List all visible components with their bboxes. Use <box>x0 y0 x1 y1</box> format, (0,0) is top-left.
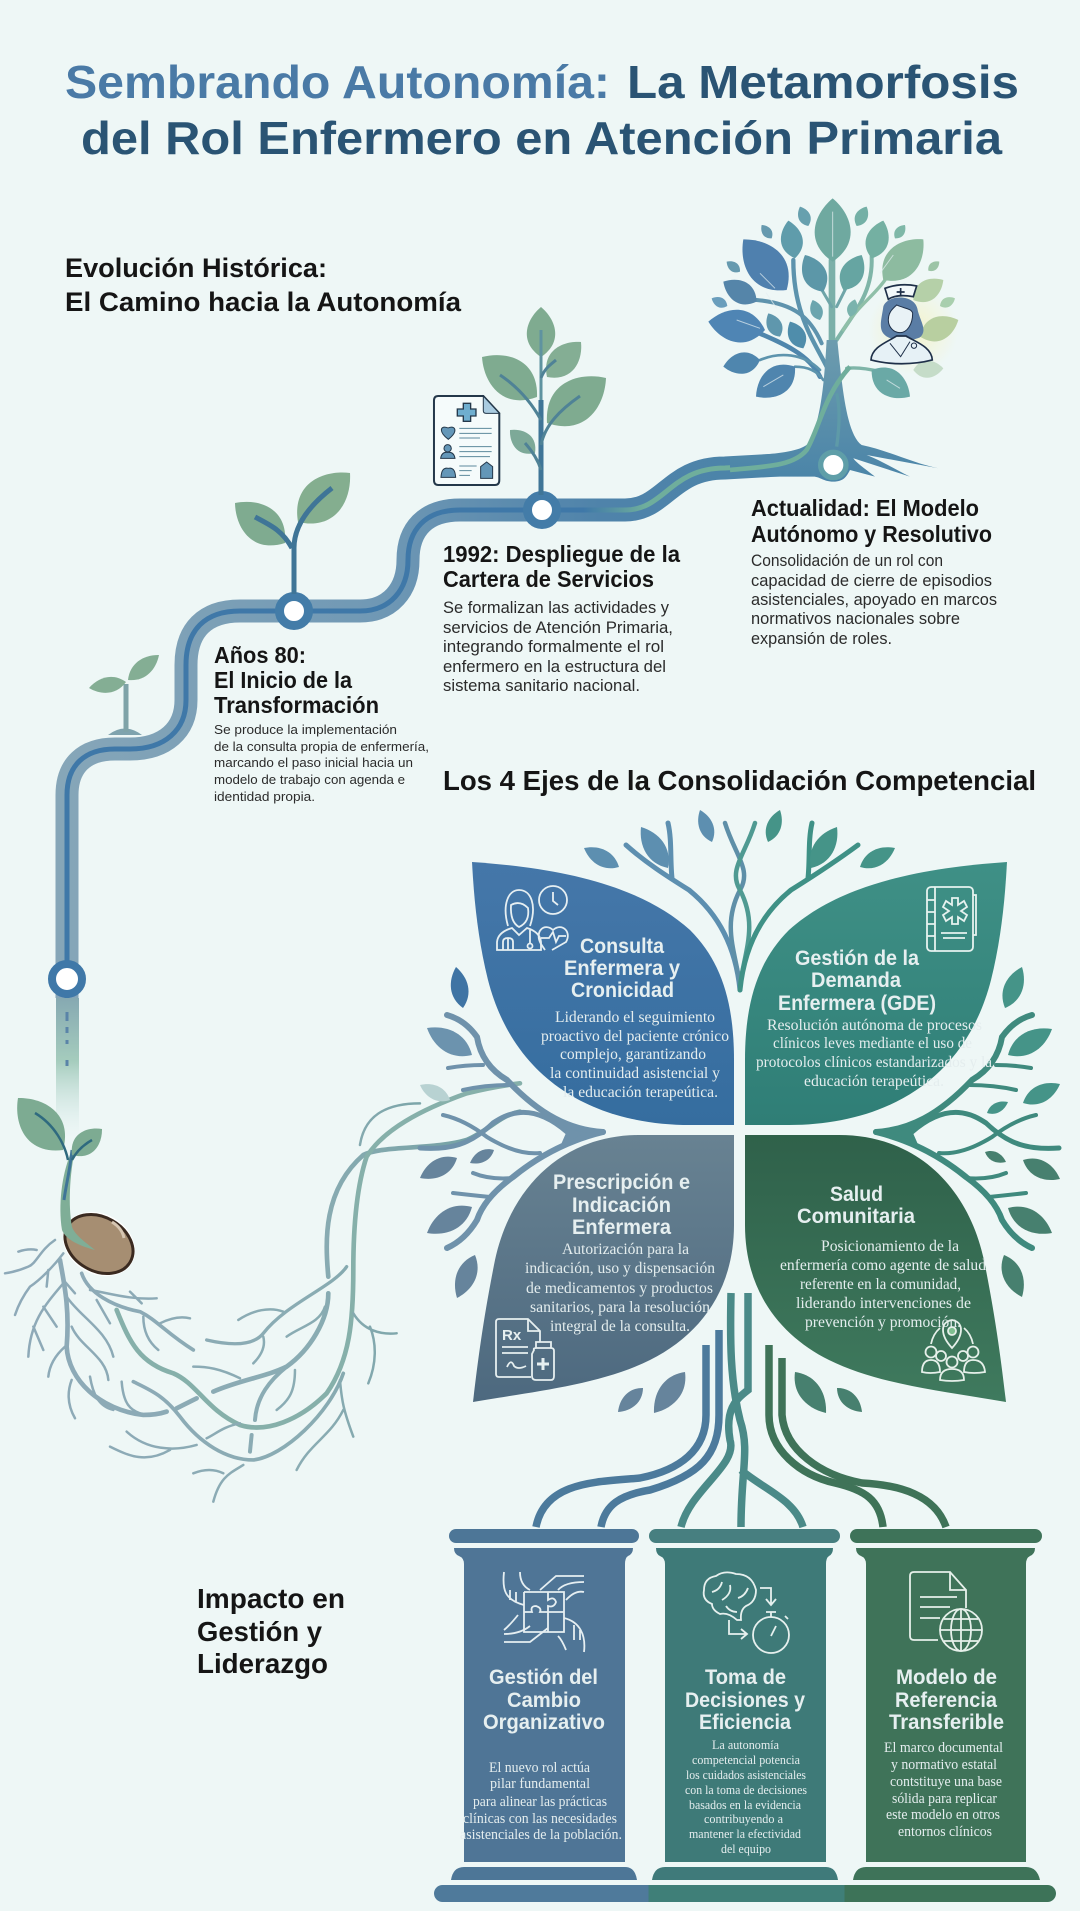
title: Organizativo <box>483 1711 605 1734</box>
text block: mantener la efectividad <box>689 1826 801 1841</box>
title: Cambio <box>507 1689 581 1712</box>
panel: pilar gestión del cambio <box>449 1529 639 1880</box>
text block: protocolos clínicos estandarizados y la <box>756 1054 992 1071</box>
tree branches and leaves <box>420 823 1059 1248</box>
text block: Liderando el seguimiento <box>555 1009 715 1026</box>
icon: seed with sprout <box>3 1085 147 1289</box>
text block: proactivo del paciente crónico <box>541 1028 729 1045</box>
title: Sembrando Autonomía: <box>65 56 610 108</box>
icon: prescription and bottle <box>496 1319 554 1380</box>
icon: final tree with nurse <box>706 198 963 482</box>
title: Prescripción e <box>553 1171 690 1194</box>
branches: left side <box>420 1015 603 1248</box>
milestone: 1992: 1992: Despliegue de la <box>443 541 680 567</box>
title: Eficiencia <box>699 1711 791 1734</box>
panel: salud comunitaria <box>745 1135 1006 1402</box>
icon: hands and puzzle <box>503 1572 584 1652</box>
text block: La autonomía <box>712 1737 779 1752</box>
milestone: años 80: modelo de trabajo con agenda e <box>214 772 405 787</box>
title: Referencia <box>895 1689 997 1712</box>
leaves around quadrants <box>416 808 1064 1419</box>
text block: para alinear las prácticas <box>473 1794 607 1810</box>
milestone: actualidad: Autónomo y Resolutivo <box>751 521 992 547</box>
title: del Rol Enfermero en Atención Primaria <box>81 112 1002 164</box>
node 3 <box>528 496 556 524</box>
title: Decisiones y <box>685 1689 805 1712</box>
text block: Autorización para la <box>562 1241 689 1258</box>
milestone: años 80: Se produce la implementación <box>214 722 397 737</box>
milestone: años 80: El Inicio de la <box>214 667 352 693</box>
milestone: 1992: enfermero en la estructura del <box>443 658 666 676</box>
title <box>797 1183 915 1228</box>
text block: este modelo en otros <box>886 1807 1000 1823</box>
title: Cronicidad <box>571 979 674 1002</box>
heading: impacto: Liderazgo <box>197 1648 328 1679</box>
text block: sanitarios, para la resolución <box>530 1299 710 1316</box>
heading: evolución histórica: Evolución Histórica: <box>65 253 327 283</box>
title <box>889 1666 1004 1734</box>
text block: Posicionamiento de la <box>821 1238 959 1255</box>
title <box>685 1666 805 1734</box>
icon: notebook <box>927 887 976 951</box>
milestone: actualidad: Actualidad: El Modelo <box>751 495 979 521</box>
milestone: años 80: Años 80: <box>214 642 306 668</box>
panel: consulta enfermera <box>472 862 734 1125</box>
text block <box>756 1017 992 1090</box>
node 1 <box>52 964 82 994</box>
milestone: años 80: identidad propia. <box>214 789 315 804</box>
panel: gestión de la demanda <box>745 862 1007 1125</box>
milestone: actualidad: expansión de roles. <box>751 630 892 648</box>
title: La Metamorfosis <box>627 56 1019 108</box>
icon: community <box>922 1320 985 1381</box>
icon: medical document <box>434 396 499 485</box>
milestone: actualidad <box>751 495 997 648</box>
branches: right side <box>876 1015 1059 1248</box>
milestone: años 80: Transformación <box>214 692 379 718</box>
title: Gestión de la <box>795 947 919 970</box>
icon: plant at node 2 <box>224 458 364 594</box>
text block <box>884 1740 1003 1840</box>
title <box>553 1171 690 1239</box>
text block: competencial potencia <box>692 1752 800 1767</box>
heading: 4 ejes: Los 4 Ejes de la Consolidación Competencial <box>443 765 1036 796</box>
panel: pilar toma de decisiones <box>649 1529 840 1880</box>
branches: upper canopy <box>626 823 858 990</box>
title: Enfermera y <box>564 957 680 980</box>
icon: prescription and bottle: Rx <box>502 1327 522 1344</box>
milestone: actualidad: capacidad de cierre de episodios <box>751 572 992 590</box>
milestone: actualidad: Consolidación de un rol con <box>751 552 943 570</box>
heading: impacto <box>197 1583 345 1679</box>
text block: asistenciales de la población. <box>460 1827 622 1843</box>
text block: la continuidad asistencial y <box>550 1065 720 1082</box>
icon: small seedling <box>88 649 164 735</box>
title <box>483 1666 605 1734</box>
icon: nurse, clock and heart <box>497 886 568 950</box>
title: Salud <box>830 1183 883 1206</box>
panel: pilar modelo de referencia <box>850 1529 1042 1880</box>
title <box>65 56 1019 164</box>
heading: impacto: Gestión y <box>197 1616 322 1647</box>
milestone: años 80 <box>214 642 429 804</box>
text block: integral de la consulta. <box>550 1318 690 1335</box>
milestone: 1992: Se formalizan las actividades y <box>443 599 670 617</box>
node 2 <box>280 596 308 626</box>
text block: la educación terapeútica. <box>563 1084 718 1101</box>
pillars plinth <box>434 1885 1056 1902</box>
text block <box>460 1760 622 1843</box>
icon: plant at node 3 <box>471 307 619 495</box>
milestone: actualidad: asistenciales, apoyado en marcos <box>751 591 997 609</box>
roots into pillars <box>536 1293 946 1527</box>
icon: nurse <box>871 285 932 364</box>
title: Comunitaria <box>797 1205 915 1228</box>
text block: entornos clínicos <box>898 1824 992 1840</box>
milestone: 1992: servicios de Atención Primaria, <box>443 619 673 637</box>
title: Gestión del <box>489 1666 598 1689</box>
text block: contribuyendo a <box>704 1811 783 1826</box>
heading: impacto: Impacto en <box>197 1583 345 1614</box>
text block: clínicas con las necesidades <box>463 1811 617 1827</box>
icon: brain and stopwatch <box>704 1572 789 1653</box>
text block: indicación, uso y dispensación <box>525 1260 715 1277</box>
text block: El marco documental <box>884 1740 1003 1756</box>
title <box>778 947 936 1015</box>
panel: prescripción <box>473 1135 734 1402</box>
text block: los cuidados asistenciales <box>686 1767 806 1782</box>
text block <box>525 1241 715 1335</box>
text block: contstituye una base <box>890 1774 1002 1790</box>
milestone: 1992 <box>443 541 680 695</box>
text block: educación terapeútica. <box>804 1073 944 1090</box>
title: Indicación <box>572 1194 671 1217</box>
text block: de medicamentos y productos <box>526 1280 713 1297</box>
milestone: años 80: de la consulta propia de enfermería, <box>214 739 429 754</box>
text block: enfermería como agente de salud <box>780 1257 986 1274</box>
heading: evolución histórica: El Camino hacia la Autonomía <box>65 287 462 317</box>
text block: liderando intervenciones de <box>796 1295 971 1312</box>
text block: sólida para replicar <box>892 1791 997 1807</box>
timeline path <box>56 462 833 1138</box>
text block: con la toma de decisiones <box>685 1782 807 1797</box>
text block: del equipo <box>721 1841 771 1856</box>
text block: Resolución autónoma de procesos <box>767 1017 982 1034</box>
text block: clínicos leves mediante el uso de <box>773 1035 972 1052</box>
milestone: 1992: sistema sanitario nacional. <box>443 677 640 695</box>
text block: El nuevo rol actúa <box>489 1760 590 1776</box>
milestone: 1992: Cartera de Servicios <box>443 566 654 592</box>
icon: document and globe <box>910 1572 982 1651</box>
title: Toma de <box>705 1666 786 1689</box>
text block: y normativo estatal <box>891 1757 997 1773</box>
title: Demanda <box>811 969 901 992</box>
milestone: 1992: integrando formalmente el rol <box>443 638 664 656</box>
text block: prevención y promoción. <box>805 1314 961 1331</box>
text block <box>541 1009 729 1101</box>
text block <box>685 1737 807 1856</box>
title <box>564 935 680 1002</box>
text block: pilar fundamental <box>490 1776 590 1792</box>
title: Consulta <box>580 935 664 958</box>
title: Enfermera (GDE) <box>778 992 936 1015</box>
heading: evolución histórica <box>65 253 462 317</box>
text block: complejo, garantizando <box>560 1046 706 1063</box>
text block: basados en la evidencia <box>689 1797 801 1812</box>
title: Enfermera <box>572 1216 671 1239</box>
milestone: años 80: marcando el paso inicial hacia un <box>214 755 413 770</box>
title: Modelo de <box>896 1666 997 1689</box>
text block <box>780 1238 986 1331</box>
roots network <box>5 1083 520 1502</box>
milestone: actualidad: normativos nacionales sobre <box>751 610 960 628</box>
text block: referente en la comunidad, <box>800 1276 961 1293</box>
title: Transferible <box>889 1711 1004 1734</box>
